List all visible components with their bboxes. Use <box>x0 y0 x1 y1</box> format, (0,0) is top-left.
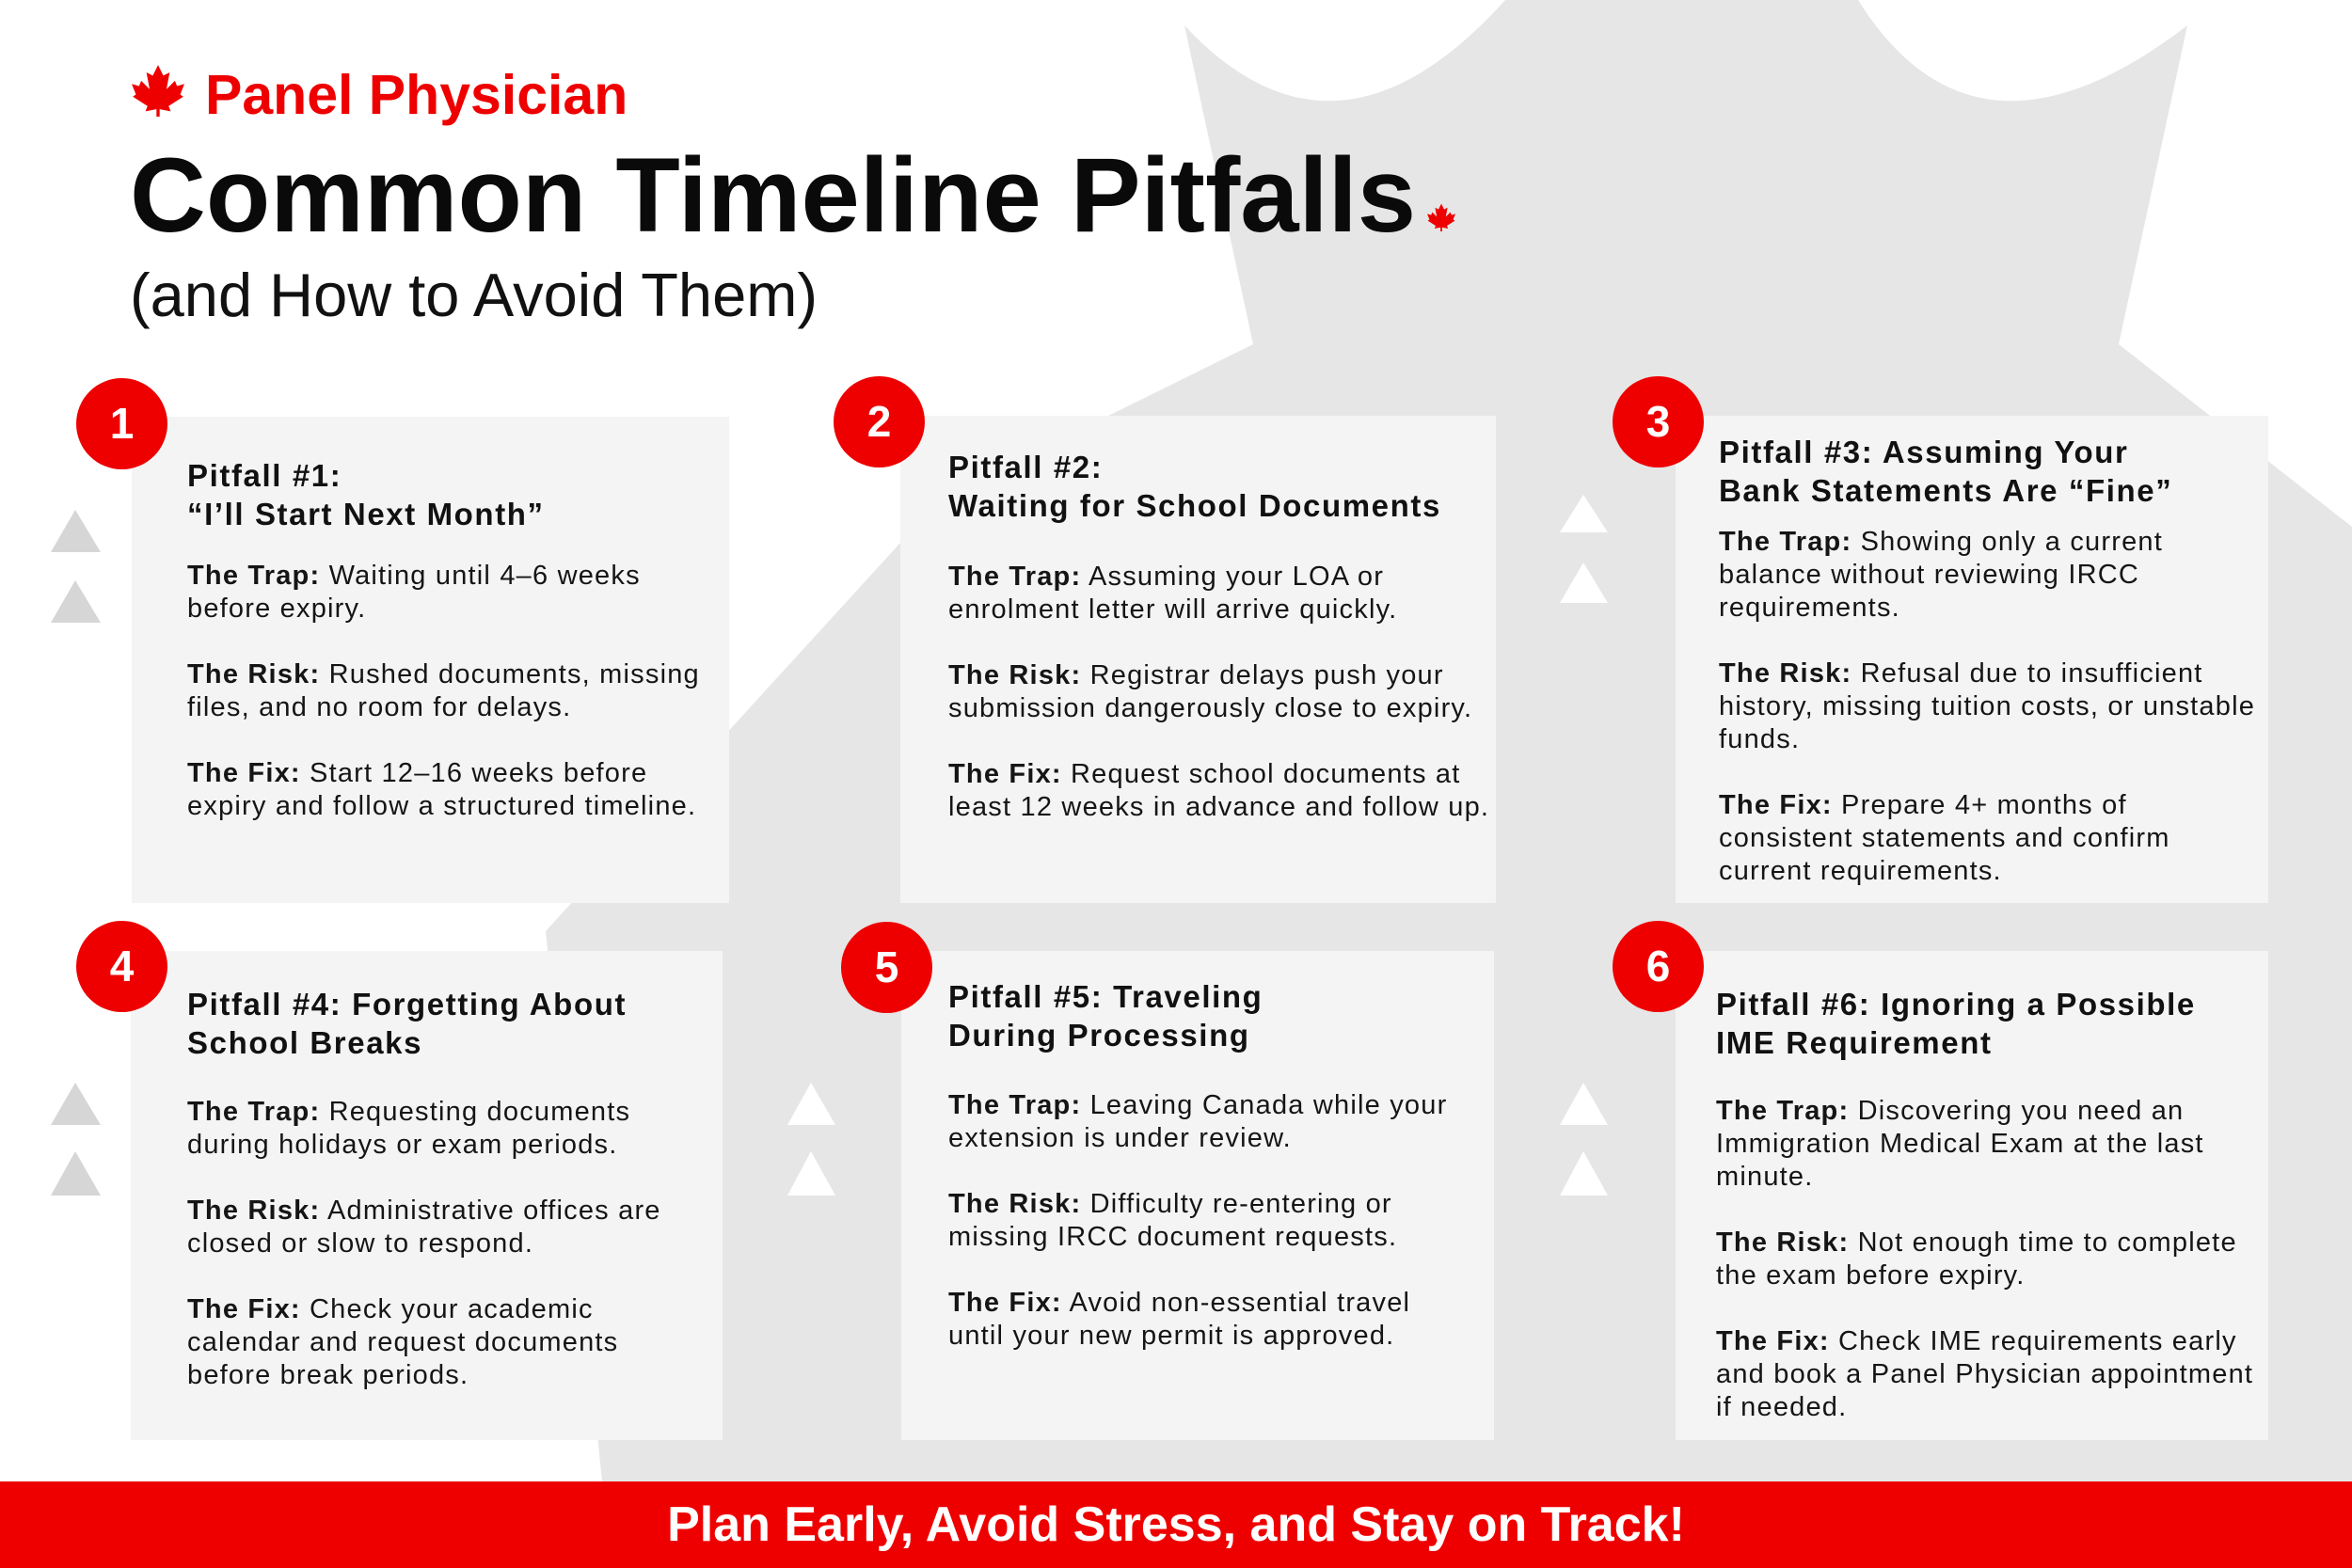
text: pitfall 2: least 12 weeks in advance and follow up. <box>948 792 1489 822</box>
text: pitfall 3 <box>1719 435 2255 886</box>
number badge 5: 5 <box>875 942 898 991</box>
text: pitfall 4: closed or slow to respond. <box>187 1228 533 1259</box>
text: pitfall 5: The Fix: Avoid non-essential travel <box>948 1288 1410 1318</box>
footer banner: Plan Early, Avoid Stress, and Stay on Track! <box>667 1497 1685 1552</box>
text: pitfall 5: Pitfall #5: Traveling <box>948 979 1263 1014</box>
text: pitfall 4: calendar and request documents <box>187 1327 618 1357</box>
text: pitfall 3: Pitfall #3: Assuming Your <box>1719 435 2128 469</box>
text: pitfall 4: The Trap: Requesting documents <box>187 1097 630 1127</box>
text: pitfall 5 <box>948 979 1447 1351</box>
text: pitfall 3: requirements. <box>1719 593 1900 623</box>
text: pitfall 3: funds. <box>1719 724 1800 754</box>
panel: pitfall 6 <box>1676 951 2268 1440</box>
text: pitfall 6: if needed. <box>1716 1392 1847 1422</box>
panel: pitfall 2 <box>900 416 1496 903</box>
text: pitfall 4: before break periods. <box>187 1360 469 1390</box>
text: pitfall 2: The Fix: Request school documents at <box>948 759 1460 789</box>
text: pitfall 1: expiry and follow a structured timeline. <box>187 791 696 821</box>
text: pitfall 6: minute. <box>1716 1162 1814 1192</box>
text: pitfall 6 <box>1716 987 2253 1422</box>
text: pitfall 1: Pitfall #1: <box>187 458 342 493</box>
panel: pitfall 4 <box>131 951 723 1440</box>
text: pitfall 3: Bank Statements Are “Fine” <box>1719 473 2172 508</box>
text: pitfall 3: The Risk: Refusal due to insufficient <box>1719 658 2203 689</box>
footer banner <box>0 1481 2352 1568</box>
title: Common Timeline Pitfalls <box>130 136 1416 254</box>
text: pitfall 6: Immigration Medical Exam at the last <box>1716 1129 2204 1159</box>
text: pitfall 2: Pitfall #2: <box>948 450 1103 484</box>
text: pitfall 4: School Breaks <box>187 1025 422 1060</box>
text: pitfall 4: during holidays or exam periods. <box>187 1130 618 1160</box>
panel: pitfall 3 <box>1676 416 2268 903</box>
text: pitfall 5: The Trap: Leaving Canada while your <box>948 1090 1447 1120</box>
text: pitfall 5: The Risk: Difficulty re-entering or <box>948 1189 1392 1219</box>
number badge 2: 2 <box>867 397 891 446</box>
text: pitfall 1: The Risk: Rushed documents, missing <box>187 659 700 689</box>
panel: pitfall 1 <box>132 417 729 903</box>
panel: pitfall 5 <box>901 951 1494 1440</box>
text: pitfall 4: Pitfall #4: Forgetting About <box>187 987 627 1022</box>
text: pitfall 2: submission dangerously close to expiry. <box>948 693 1472 723</box>
text: pitfall 2: The Trap: Assuming your LOA or <box>948 562 1384 592</box>
number badge 4: 4 <box>110 942 134 990</box>
text: pitfall 4: The Risk: Administrative offices are <box>187 1196 661 1226</box>
text: pitfall 6: Pitfall #6: Ignoring a Possible <box>1716 987 2196 1022</box>
text: pitfall 1: before expiry. <box>187 594 366 624</box>
text: pitfall 1 <box>187 458 700 821</box>
text: pitfall 2: Waiting for School Documents <box>948 488 1441 523</box>
text: pitfall 6: the exam before expiry. <box>1716 1260 2025 1291</box>
text: pitfall 5: until your new permit is approved. <box>948 1321 1394 1351</box>
text: pitfall 2: The Risk: Registrar delays push your <box>948 660 1444 690</box>
text: pitfall 5: extension is under review. <box>948 1123 1292 1153</box>
text: pitfall 5: missing IRCC document requests. <box>948 1222 1397 1252</box>
brand: Panel Physician: Panel Physician <box>205 64 628 126</box>
text: pitfall 4 <box>187 987 661 1390</box>
text: pitfall 6: IME Requirement <box>1716 1025 1993 1060</box>
text: pitfall 2 <box>948 450 1489 822</box>
text: pitfall 6: The Trap: Discovering you need an <box>1716 1096 2184 1126</box>
text: pitfall 3: history, missing tuition costs, or unstable <box>1719 691 2255 721</box>
number badge 4 <box>76 921 167 1012</box>
text: pitfall 5: During Processing <box>948 1018 1250 1053</box>
subtitle: (and How to Avoid Them) <box>130 261 818 329</box>
number badge 2 <box>834 376 925 467</box>
text: pitfall 4: The Fix: Check your academic <box>187 1294 594 1324</box>
number badge 5 <box>841 922 932 1013</box>
text: pitfall 3: The Trap: Showing only a current <box>1719 527 2163 557</box>
text: pitfall 1: The Trap: Waiting until 4–6 weeks <box>187 561 641 591</box>
number badge 3: 3 <box>1646 397 1670 446</box>
number badge 3 <box>1613 376 1704 467</box>
text: pitfall 3: consistent statements and confirm <box>1719 823 2170 853</box>
text: pitfall 1: files, and no room for delays. <box>187 692 571 722</box>
text: pitfall 1: The Fix: Start 12–16 weeks before <box>187 758 647 788</box>
text: pitfall 6: The Fix: Check IME requirements early <box>1716 1326 2237 1356</box>
text: pitfall 3: balance without reviewing IRCC <box>1719 560 2139 590</box>
text: pitfall 6: The Risk: Not enough time to complete <box>1716 1227 2237 1258</box>
number badge 6: 6 <box>1646 942 1670 990</box>
text: pitfall 2: enrolment letter will arrive quickly. <box>948 594 1397 625</box>
number badge 6 <box>1613 921 1704 1012</box>
text: pitfall 6: and book a Panel Physician appointment <box>1716 1359 2253 1389</box>
icon: maple leaf <box>132 65 184 117</box>
text: pitfall 1: “I’ll Start Next Month” <box>187 497 545 531</box>
text: pitfall 3: The Fix: Prepare 4+ months of <box>1719 790 2127 820</box>
number badge 1: 1 <box>110 399 134 448</box>
text: pitfall 3: current requirements. <box>1719 856 2002 886</box>
number badge 1 <box>76 378 167 469</box>
